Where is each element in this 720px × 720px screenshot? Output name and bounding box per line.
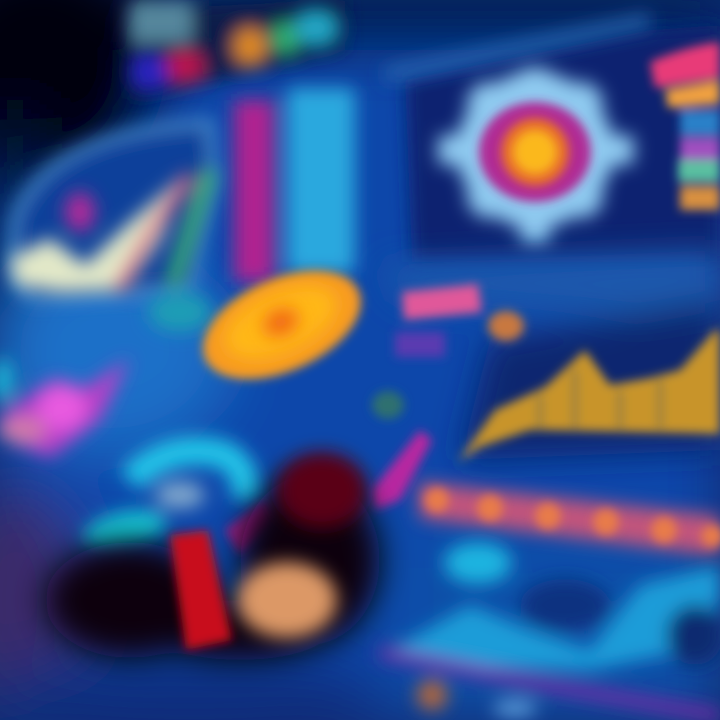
yellow centre <box>513 130 557 174</box>
tan circle <box>237 562 337 638</box>
panel: top colour strip <box>125 0 345 100</box>
panel frame <box>385 20 650 75</box>
chart peaks <box>10 170 212 332</box>
magenta ring <box>479 102 591 202</box>
panel outline <box>12 122 215 298</box>
band <box>418 482 720 556</box>
dots <box>425 488 720 547</box>
orange halo <box>501 118 569 186</box>
cyan bar <box>287 88 355 273</box>
panel: dotted band <box>418 482 720 556</box>
dark mass <box>45 475 380 660</box>
icon: cyan arc <box>80 451 246 556</box>
dark red head <box>277 452 367 528</box>
icon: magenta diagonal <box>225 430 432 555</box>
panel: vertical bars <box>234 88 355 282</box>
panel: bottom-right blobs <box>380 542 720 717</box>
orange tag <box>488 311 524 341</box>
pink tag <box>402 284 482 320</box>
icon: orange ellipse <box>187 249 377 401</box>
purple tag <box>395 332 445 357</box>
panel: left line chart <box>10 122 215 332</box>
panel background <box>405 25 720 262</box>
panel: lower-left pink chart <box>0 358 130 458</box>
panel: right stripes <box>650 42 720 210</box>
gear teeth <box>438 68 634 244</box>
olive tag <box>372 391 404 419</box>
magenta bar <box>234 100 274 282</box>
panel: middle band <box>380 250 720 460</box>
small tags <box>372 284 524 419</box>
icon: dark figure <box>45 452 380 660</box>
area chart <box>458 330 720 462</box>
panel: gear target <box>385 20 720 262</box>
red stripe <box>170 530 232 650</box>
